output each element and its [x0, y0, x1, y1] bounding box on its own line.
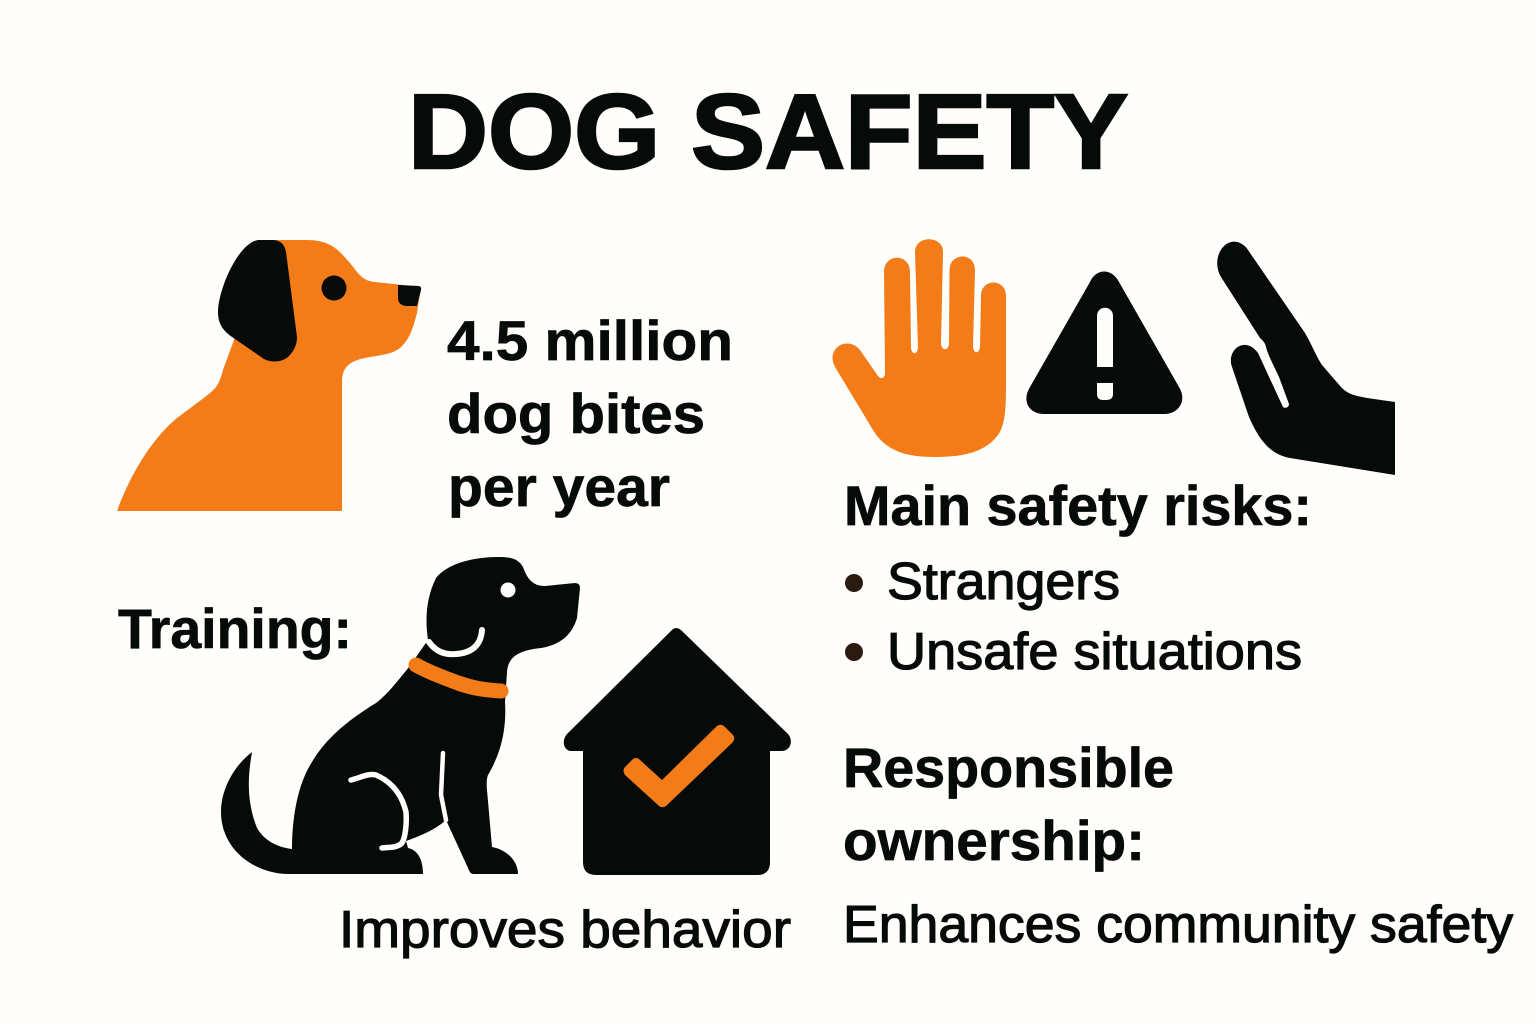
heading: responsible ownership: ownership:	[843, 809, 1145, 872]
icon: warning triangle	[1026, 272, 1182, 414]
eye	[500, 582, 516, 598]
icon: dog nose	[398, 285, 421, 306]
heading: main safety risks: Main safety risks:	[844, 474, 1312, 537]
list item: unsafe situations: Unsafe situations	[887, 623, 1302, 681]
icon: orange stop hand	[833, 239, 1006, 457]
leg line	[441, 753, 446, 820]
bullet	[845, 574, 863, 592]
collar	[416, 665, 501, 691]
statistic: dog bites: per year	[448, 455, 670, 518]
icon: house with check mark	[564, 628, 791, 875]
icon: dog ear	[218, 240, 297, 361]
list item: strangers: Strangers	[887, 553, 1120, 611]
icon: dog eye	[322, 276, 346, 300]
heading: responsible ownership	[843, 736, 1174, 872]
ear line	[429, 630, 482, 654]
exclamation mark	[1097, 308, 1113, 400]
title: DOG SAFETY	[408, 73, 1128, 191]
statistic: dog bites	[447, 309, 733, 518]
caption: enhances community safety: Enhances community safety	[843, 896, 1513, 954]
icon: sitting black dog	[221, 557, 580, 874]
icon: black hand	[1217, 242, 1395, 475]
icon: orange dog head	[117, 240, 421, 511]
check mark	[624, 725, 734, 807]
heading: training: Training:	[118, 597, 352, 660]
list: safety risks	[845, 553, 1302, 681]
heading: responsible ownership: Responsible	[843, 736, 1174, 799]
caption: improves behavior: Improves behavior	[339, 901, 791, 959]
statistic: dog bites: dog bites	[447, 382, 705, 445]
statistic: dog bites: 4.5 million	[447, 309, 733, 372]
bullet	[845, 643, 863, 661]
haunch line	[351, 775, 406, 848]
